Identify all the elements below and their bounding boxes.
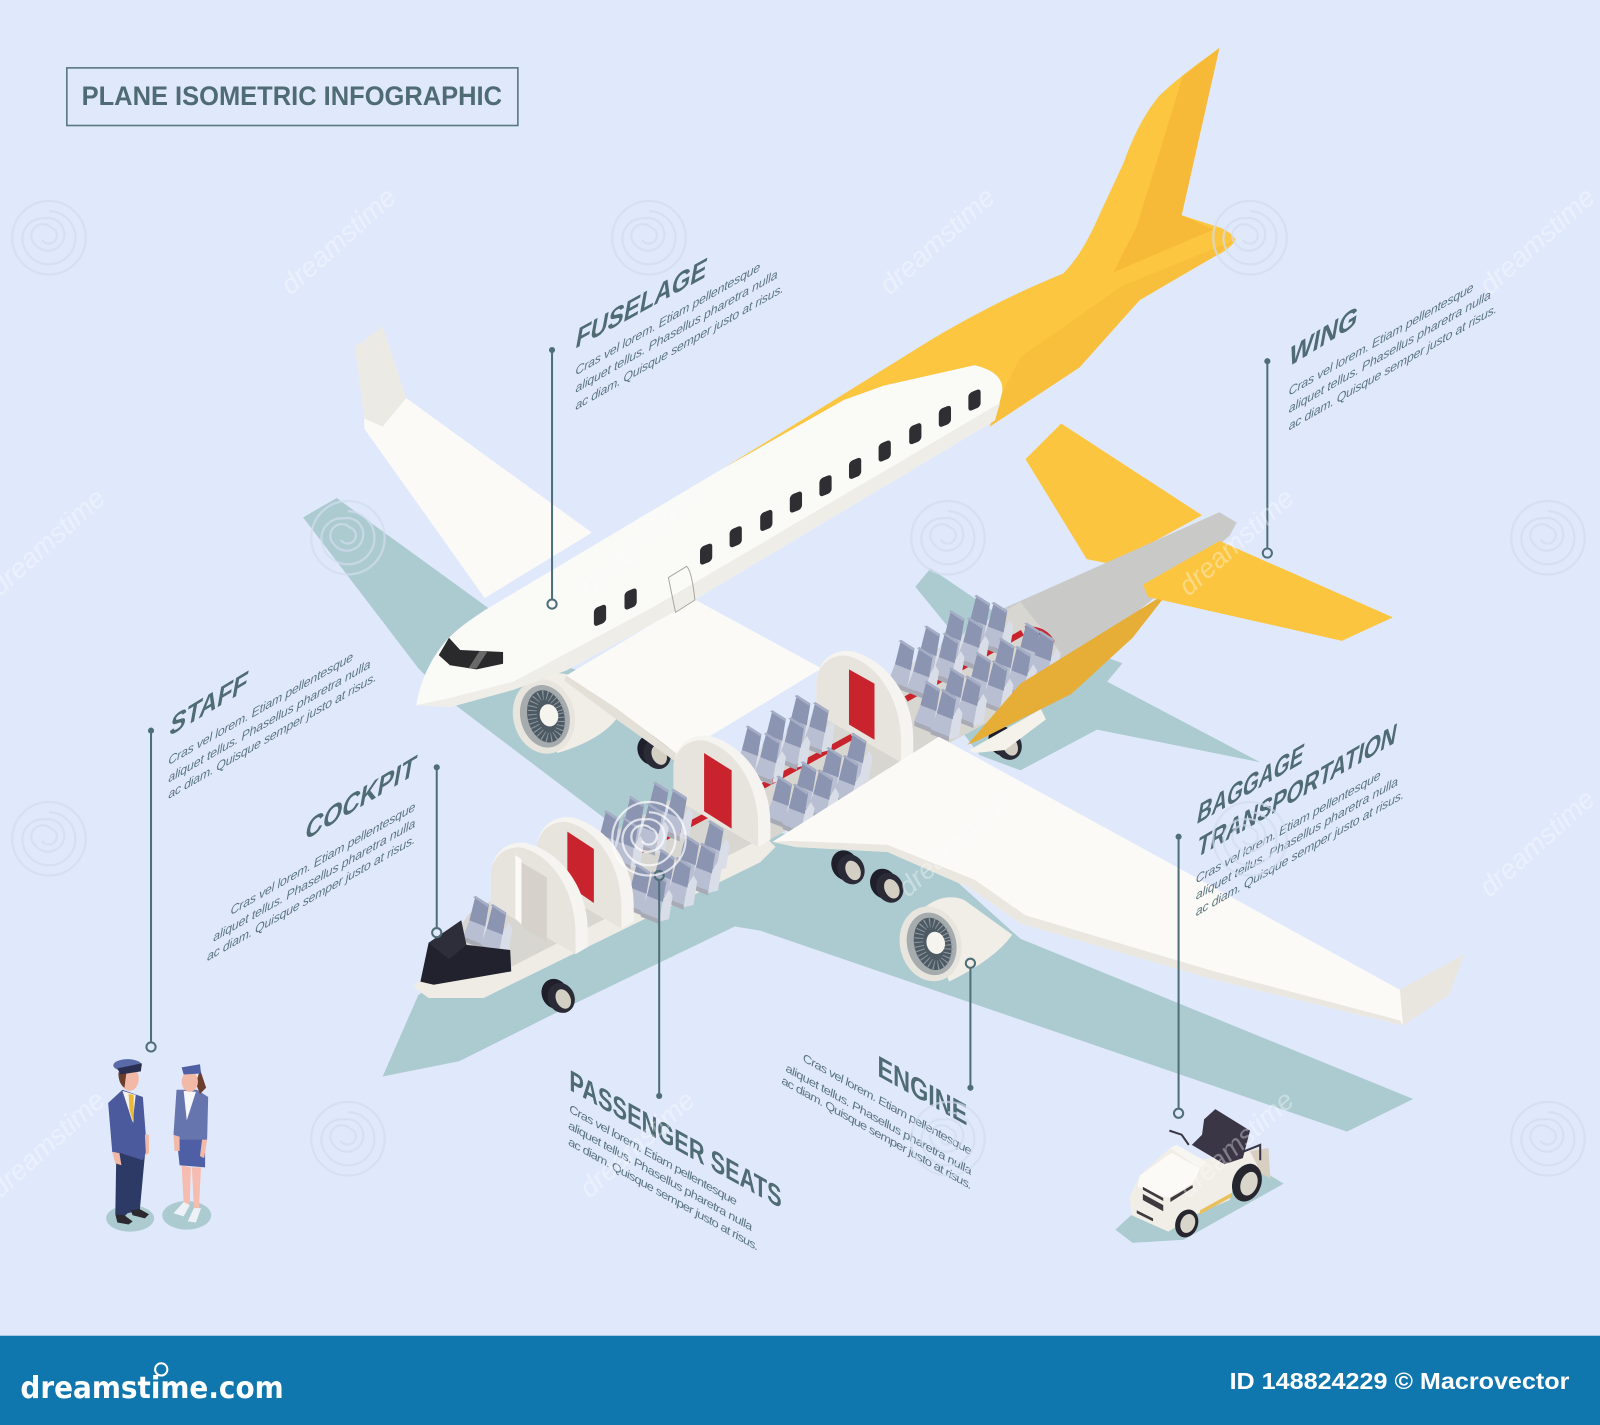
label: baggage transportation: Cras vel lorem. Etiam pellentesque bbox=[1196, 767, 1381, 886]
vehicle shadow bbox=[1115, 1163, 1284, 1243]
cabin windows bbox=[594, 388, 981, 627]
cowl bbox=[1170, 1145, 1207, 1168]
rear fender bbox=[1250, 1148, 1270, 1179]
staff: pilot bbox=[106, 1059, 154, 1232]
label: wing: ac diam. Quisque semper justo at risus. bbox=[1289, 301, 1497, 433]
passenger seats leader line bbox=[655, 871, 664, 1099]
watermark spirals bbox=[12, 201, 1585, 1176]
label: engine: Cras vel lorem. Etiam pellentesque bbox=[803, 1050, 971, 1158]
cockpit dashboard bbox=[420, 920, 511, 985]
driver seat bbox=[1192, 1109, 1250, 1164]
label: staff: aliquet tellus. Phasellus pharetra nulla bbox=[168, 656, 370, 785]
label: wing: Cras vel lorem. Etiam pellentesque bbox=[1289, 280, 1473, 399]
watermark text: dreamstime bbox=[1473, 181, 1600, 300]
red aisle carpet bbox=[624, 633, 1022, 859]
yellow stripe bbox=[1200, 1193, 1232, 1214]
bulkhead arch with red door 3 bbox=[673, 736, 770, 847]
near wing of lower plane bbox=[772, 737, 1464, 1026]
label: baggage transportation: ac diam. Quisque semper justo at risus. bbox=[1196, 787, 1404, 919]
label: cockpit: Cras vel lorem. Etiam pellentesque bbox=[231, 799, 415, 918]
label: engine: aliquet tellus. Phasellus pharetra nulla bbox=[786, 1060, 971, 1178]
watermark text bbox=[0, 181, 1600, 1203]
plane ground shadow bbox=[303, 498, 1413, 1132]
label: wing: WING bbox=[1287, 299, 1361, 374]
wing leader line bbox=[1263, 358, 1272, 558]
label: cockpit bbox=[207, 748, 441, 964]
label: staff: Cras vel lorem. Etiam pellentesque bbox=[168, 649, 353, 768]
label: baggage transportation: TRANSPORTATION bbox=[1195, 716, 1400, 865]
footer logo: dreamstime.com bbox=[20, 1371, 284, 1406]
hood bbox=[1138, 1153, 1200, 1198]
lower plane aft fuselage bbox=[995, 512, 1237, 704]
label: baggage transportation: BAGGAGE bbox=[1195, 736, 1307, 831]
rear stabilizer far side bbox=[1026, 423, 1202, 564]
label: wing: aliquet tellus. Phasellus pharetra nulla bbox=[1289, 287, 1491, 416]
front wheel bbox=[1171, 1206, 1202, 1241]
label: wing bbox=[1263, 280, 1497, 558]
baggage leader line bbox=[1174, 834, 1183, 1118]
label: cockpit: COCKPIT bbox=[303, 748, 419, 847]
rear yellow belly fairing bbox=[967, 592, 1168, 753]
nose wheel bbox=[537, 974, 580, 1017]
label: passenger seats: aliquet tellus. Phasellus pharetra nulla bbox=[568, 1117, 752, 1234]
watermark text: dreamstime bbox=[1172, 482, 1300, 601]
far wing of lower plane bbox=[564, 599, 821, 760]
label: staff: STAFF bbox=[167, 664, 251, 743]
cockpit seats bbox=[463, 896, 512, 957]
title: PLANE ISOMETRIC INFOGRAPHIC bbox=[82, 81, 502, 111]
label: staff: ac diam. Quisque semper justo at risus. bbox=[168, 669, 377, 802]
staff: flight attendant bbox=[162, 1064, 211, 1230]
label: engine: ac diam. Quisque semper justo at risus. bbox=[782, 1073, 971, 1193]
cabin floor and hull bbox=[413, 602, 1061, 998]
upper plane tail bbox=[721, 48, 1236, 469]
watermark text: dreamstime bbox=[1172, 1084, 1300, 1203]
label: fuselage: aliquet tellus. Phasellus pharetra nulla bbox=[576, 267, 778, 396]
door outline bbox=[668, 566, 695, 612]
upper plane engine bbox=[505, 672, 618, 760]
bulkhead arch with red door 4 bbox=[816, 651, 913, 762]
lower engine bbox=[892, 897, 1012, 988]
upper plane wing bbox=[355, 327, 592, 598]
label: engine: ENGINE bbox=[878, 1049, 967, 1132]
label: baggage transportation bbox=[1174, 716, 1404, 1118]
label: passenger seats: Cras vel lorem. Etiam pellentesque bbox=[569, 1101, 737, 1209]
label: cockpit: aliquet tellus. Phasellus pharetra nulla bbox=[213, 816, 415, 945]
watermark text: dreamstime bbox=[891, 783, 1019, 902]
label: baggage transportation: aliquet tellus. Phasellus pharetra nulla bbox=[1196, 774, 1398, 903]
bulkhead arch with red door 2 bbox=[537, 817, 634, 929]
aisle end cap bbox=[1024, 626, 1055, 642]
upper plane fuselage bbox=[416, 365, 1002, 707]
label: fuselage: FUSELAGE bbox=[573, 250, 710, 355]
rear wheel bbox=[1227, 1160, 1267, 1206]
rail bbox=[1169, 1131, 1260, 1160]
label: passenger seats: PASSENGER SEATS bbox=[569, 1063, 782, 1215]
watermark text: dreamstime bbox=[573, 1084, 701, 1203]
cockpit window bbox=[439, 638, 503, 669]
label: fuselage bbox=[547, 250, 784, 609]
passenger seats: rear section bbox=[889, 595, 1060, 741]
title bbox=[67, 68, 518, 126]
label: passenger seats: ac diam. Quisque semper justo at risus. bbox=[568, 1134, 758, 1254]
passenger seats: front section bbox=[594, 782, 730, 924]
watermark text: dreamstime bbox=[573, 482, 701, 601]
main wheels bbox=[826, 846, 908, 907]
label: cockpit: ac diam. Quisque semper justo at risus. bbox=[207, 831, 415, 964]
grille bbox=[1137, 1185, 1193, 1221]
fuselage leader line bbox=[547, 347, 557, 609]
label: staff bbox=[146, 649, 377, 1052]
engine leader line bbox=[966, 959, 975, 1091]
label: fuselage: ac diam. Quisque semper justo at risus. bbox=[576, 280, 784, 413]
baggage tractor vehicle bbox=[1115, 1109, 1284, 1243]
watermark text: dreamstime bbox=[873, 181, 1001, 300]
staff leader line bbox=[146, 728, 156, 1052]
vehicle body bbox=[1130, 1147, 1268, 1232]
watermark text: dreamstime bbox=[1473, 783, 1600, 902]
footer bar bbox=[0, 1336, 1600, 1425]
watermark text: dreamstime bbox=[274, 181, 402, 300]
cockpit leader line bbox=[432, 764, 441, 937]
bulkhead arch 1 bbox=[491, 843, 588, 954]
label: engine bbox=[782, 959, 975, 1193]
stabilizer near side bbox=[1143, 541, 1393, 641]
wheels under far wing bbox=[633, 721, 1027, 774]
label: fuselage: Cras vel lorem. Etiam pellentesque bbox=[576, 259, 760, 378]
label: passenger seats bbox=[568, 871, 782, 1254]
footer credit: ID 148824229 © Macrovector bbox=[1230, 1368, 1569, 1394]
passenger seats: middle section bbox=[736, 695, 873, 836]
